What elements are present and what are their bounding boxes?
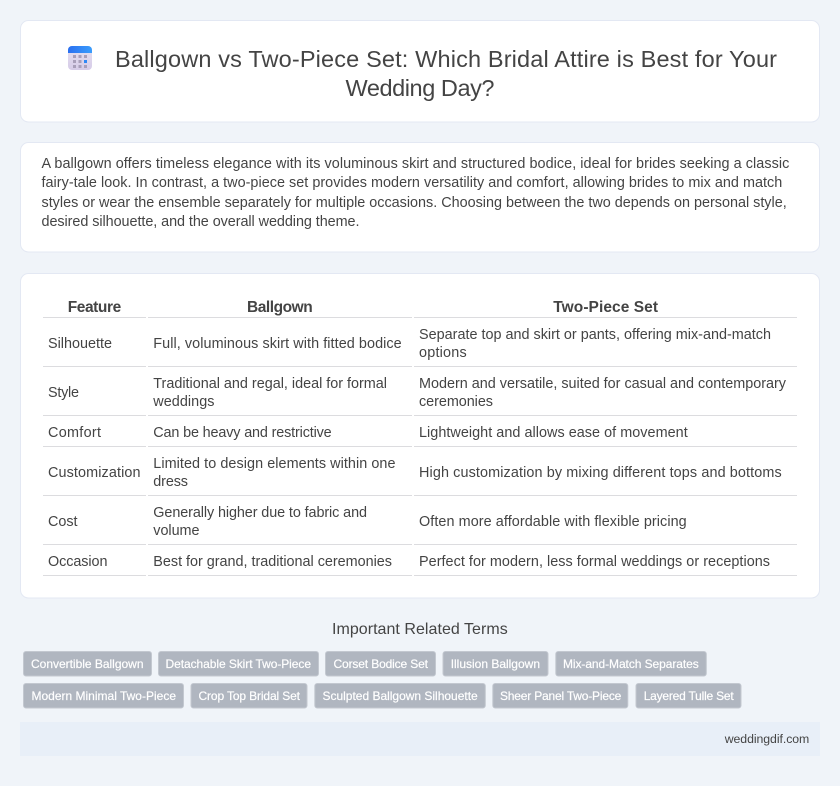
row: style (48, 376, 787, 410)
tag: crop top bridal set (191, 684, 307, 708)
row: occasion: Occasion (48, 554, 108, 570)
row: occasion (48, 554, 770, 570)
row: comfort: Comfort (48, 425, 101, 441)
table header row (68, 299, 658, 316)
tag: detachable skirt two-piece (158, 652, 318, 676)
text block: intro: styles or wear the ensemble separately for multiple occasions. Choosing between the two depends on personal style, (42, 195, 787, 211)
row: occasion: Perfect for modern, less formal weddings or receptions (419, 554, 770, 570)
table rules (43, 317, 797, 576)
text block: intro: desired silhouette, and the overall wedding theme. (42, 214, 360, 230)
tag: sheer panel two-piece: Sheer Panel Two-Piece (500, 689, 622, 703)
row: cost: Often more affordable with flexible pricing (419, 514, 687, 530)
panel: comparison table (20, 274, 820, 598)
tag: modern minimal two-piece (24, 684, 184, 708)
row: customization: Limited to design elements within one (153, 456, 396, 472)
tag: corset bodice set (326, 652, 436, 676)
tag: detachable skirt two-piece: Detachable Skirt Two-Piece (166, 657, 311, 671)
row: silhouette: Separate top and skirt or pants, offering mix-and-match (419, 327, 771, 343)
row: style: Modern and versatile, suited for casual and contemporary (419, 376, 787, 392)
tag: illusion ballgown: Illusion Ballgown (451, 657, 540, 671)
title (115, 46, 777, 101)
footer (20, 722, 820, 756)
row: style: Traditional and regal, ideal for formal (153, 376, 387, 392)
tag: layered tulle set (636, 684, 741, 708)
title: Wedding Day? (346, 75, 494, 101)
row: style: weddings (152, 394, 214, 410)
row: cost (48, 505, 687, 539)
footer: weddingdif.com (724, 732, 809, 746)
tag: sculpted ballgown silhouette (315, 684, 485, 708)
tag: mix-and-match separates (556, 652, 706, 676)
row: cost: Cost (48, 514, 78, 530)
tag group: related terms (24, 652, 741, 708)
tag: convertible ballgown: Convertible Ballgown (31, 657, 144, 671)
tag: mix-and-match separates: Mix-and-Match Separates (563, 657, 699, 671)
row: silhouette (48, 327, 771, 361)
heading: important related terms: Important Related Terms (332, 621, 508, 638)
row: silhouette: Silhouette (48, 336, 112, 352)
row: customization: dress (153, 474, 188, 490)
tag: illusion ballgown (443, 652, 548, 676)
tag: convertible ballgown (24, 652, 152, 676)
panel: intro paragraph (20, 142, 820, 252)
tag: crop top bridal set: Crop Top Bridal Set (198, 689, 301, 703)
text block: intro (42, 156, 789, 230)
panel: header (20, 20, 820, 122)
row: comfort: Lightweight and allows ease of movement (419, 425, 688, 441)
row: occasion: Best for grand, traditional ceremonies (153, 554, 392, 570)
row: comfort: Can be heavy and restrictive (153, 425, 332, 441)
text block: intro: fairy-tale look. In contrast, a two-piece set provides modern versatility and comfort, allowing brides to mix and match (42, 175, 782, 191)
tag: corset bodice set: Corset Bodice Set (334, 657, 429, 671)
icon: calendar (68, 46, 92, 70)
row: customization: Customization (48, 465, 140, 481)
table header row: Ballgown (247, 299, 313, 316)
row: silhouette: options (419, 345, 467, 361)
row: customization: High customization by mixing different tops and bottoms (419, 465, 782, 481)
tag: sheer panel two-piece (493, 684, 628, 708)
tag: sculpted ballgown silhouette: Sculpted Ballgown Silhouette (322, 689, 478, 703)
row: cost: Generally higher due to fabric and (153, 505, 367, 521)
tag: layered tulle set: Layered Tulle Set (644, 689, 734, 703)
text block: intro: A ballgown offers timeless elegance with its voluminous skirt and structured bodice, ideal for brides seeking a classic (42, 156, 789, 172)
tag: modern minimal two-piece: Modern Minimal Two-Piece (32, 689, 176, 703)
row: cost: volume (153, 523, 200, 539)
table header row: Two-Piece Set (553, 299, 658, 316)
table header row: Feature (68, 299, 122, 316)
row: comfort (48, 425, 688, 441)
row: silhouette: Full, voluminous skirt with fitted bodice (153, 336, 402, 352)
row: customization (48, 456, 782, 490)
row: style: ceremonies (419, 394, 493, 410)
title: Ballgown vs Two-Piece Set: Which Bridal Attire is Best for Your (115, 46, 777, 72)
row: style: Style (48, 385, 79, 401)
